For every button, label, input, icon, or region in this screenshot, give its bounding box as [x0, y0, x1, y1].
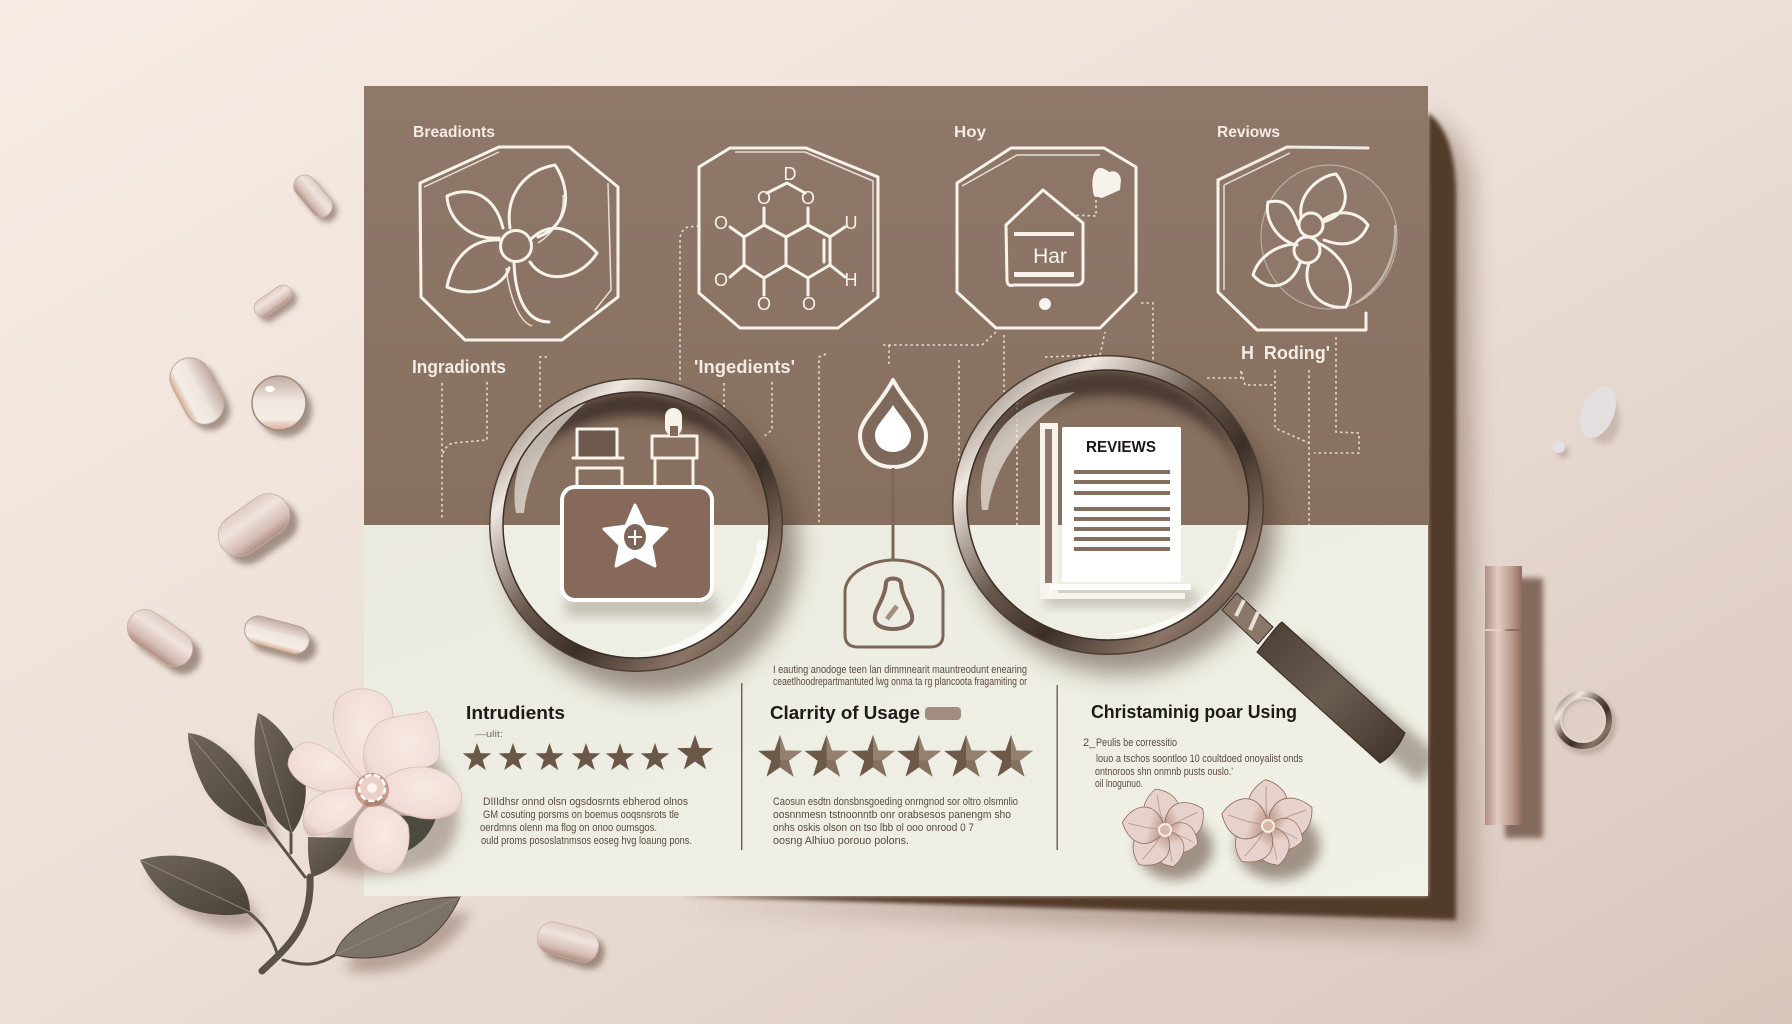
icon: hair product label hexagon: [957, 148, 1136, 328]
panel: brown top section: [364, 86, 1428, 526]
section: ingredients rating: DIIIdhsr onnd olsn ogsdosrnts ebherod olnos: [483, 796, 688, 808]
cream blobs right: [1553, 381, 1623, 458]
section: third column usage text: 2_: [1083, 737, 1096, 749]
droplet: [252, 376, 306, 430]
section: clarity of usage rating: oosng Alhiuo porouo polons.: [773, 835, 909, 847]
dotted connector lines: [442, 196, 1359, 638]
capsule 5: [534, 919, 602, 965]
flower centre: [355, 773, 389, 807]
icon: flower hexagon: [420, 147, 618, 340]
top centre caption text: ceaetlhoodrepartmantuted lwg onma ta rg plancoota fragamiting or: [773, 676, 1027, 688]
drop icon with connector: [860, 380, 926, 560]
lens glass shading: [968, 370, 1248, 640]
capsule 2: [251, 282, 295, 320]
large flower sprig: [140, 689, 470, 973]
leaves: [140, 713, 460, 958]
lightbulb badge icon: [845, 560, 943, 647]
icon: molecule hexagon: H: [844, 270, 858, 290]
panel shadow: [680, 113, 1474, 936]
section: ingredients rating: ould proms pososlatnmsos eoseg hvg loaung pons.: [481, 835, 692, 847]
lens rim: [490, 379, 782, 671]
section: third column usage text: [1083, 702, 1303, 790]
section: clarity of usage rating: Caosun esdtn donsbnsgoeding onrngnod sor oltro olsmnlio: [773, 796, 1018, 808]
stars: clarity rating: [758, 735, 1033, 777]
section: third column usage text: Peulis be corressitio: [1096, 737, 1177, 749]
handle: [1222, 593, 1405, 763]
magnifier: right lens with reviews document: [953, 356, 1405, 763]
icon: molecule hexagon: U: [844, 213, 858, 233]
icon: molecule hexagon: O: [801, 188, 815, 208]
icon: flower under glass hexagon: [1218, 147, 1397, 330]
clear capsule 2: [242, 613, 312, 657]
heading labels on brown section: 'Ingedients': [694, 357, 795, 377]
top centre caption text: [773, 664, 1027, 688]
magnifier: left lens with products: [490, 379, 782, 671]
heading labels on brown section: H Roding': [1241, 343, 1330, 363]
heading labels on brown section: Ingradionts: [412, 357, 506, 377]
section: third column usage text: ontnoroos shn onmnb pusts ouslo.': [1095, 766, 1233, 778]
clear capsule: [163, 351, 231, 431]
lipstick tube: [1485, 566, 1543, 838]
panel: cream bottom section: [364, 525, 1428, 896]
capsules and droplets left: [120, 171, 608, 972]
section: ingredients rating: Intrudients: [466, 703, 565, 723]
section: ingredients rating: oerdmns olenn ma flog on onoo oumsgos.: [480, 822, 657, 834]
capsule 1: [289, 171, 337, 221]
sprig shadow: [150, 720, 470, 973]
section: third column usage text: Christaminig poar Using: [1091, 702, 1297, 722]
icon: molecule hexagon: D: [784, 164, 796, 184]
lens rim: [953, 356, 1263, 654]
magnifier shadows: [506, 378, 1430, 770]
section: ingredients rating: [463, 703, 713, 847]
section: third column usage text: louo a tschos soontloo 10 coultdoed onoyalist onds: [1096, 753, 1303, 765]
icon: molecule hexagon: O: [757, 294, 771, 314]
icon: molecule hexagon: O: [757, 188, 771, 208]
heading labels on brown section: Hoy: [954, 124, 986, 141]
capsule 4: [120, 603, 200, 673]
heading labels on brown section: [412, 124, 1330, 377]
capsule 3: [210, 485, 298, 565]
lens glass shading: [500, 390, 780, 660]
section: third column usage text: oil lnogunuo.: [1095, 778, 1143, 790]
small pink flower left: [1118, 786, 1213, 880]
icon: hair product label hexagon: Har: [1033, 245, 1067, 268]
icon: bottles in case: [562, 408, 712, 600]
stars: ingredients rating: [463, 735, 713, 770]
section: clarity of usage rating: [758, 703, 1033, 847]
section: clarity of usage rating: onhs oskis olson on tso lbb ol ooo onrood 0 7: [773, 822, 974, 834]
section: ingredients rating: GM cosuting porsms on boemus ooqsnsrots tle: [483, 809, 679, 821]
stems: [248, 827, 335, 971]
top centre caption text: I eauting anodoge teen lan dimmnearit mauntreodunt enearing: [773, 664, 1027, 676]
section: ingredients rating: —ulit:: [475, 729, 503, 739]
heading labels on brown section: Breadionts: [413, 124, 495, 141]
icon: molecule hexagon: O: [714, 270, 728, 290]
heading labels on brown section: Reviows: [1217, 124, 1280, 141]
petals: [288, 689, 461, 873]
small pink flower right: [1216, 779, 1320, 880]
reviews document: [1040, 423, 1191, 599]
reviews document: REVIEWS: [1086, 439, 1156, 456]
icon: molecule hexagon: O: [802, 294, 816, 314]
section: clarity of usage rating: oosnnmesn tstnoonntb onr orabsesos panengm sho: [773, 809, 1011, 821]
icon: molecule hexagon: O: [714, 213, 728, 233]
divider lines: [741, 683, 1058, 850]
icon: molecule hexagon: [699, 148, 878, 328]
section: clarity of usage rating: Clarrity of Usage: [770, 703, 920, 723]
metal ring: [1557, 694, 1613, 751]
